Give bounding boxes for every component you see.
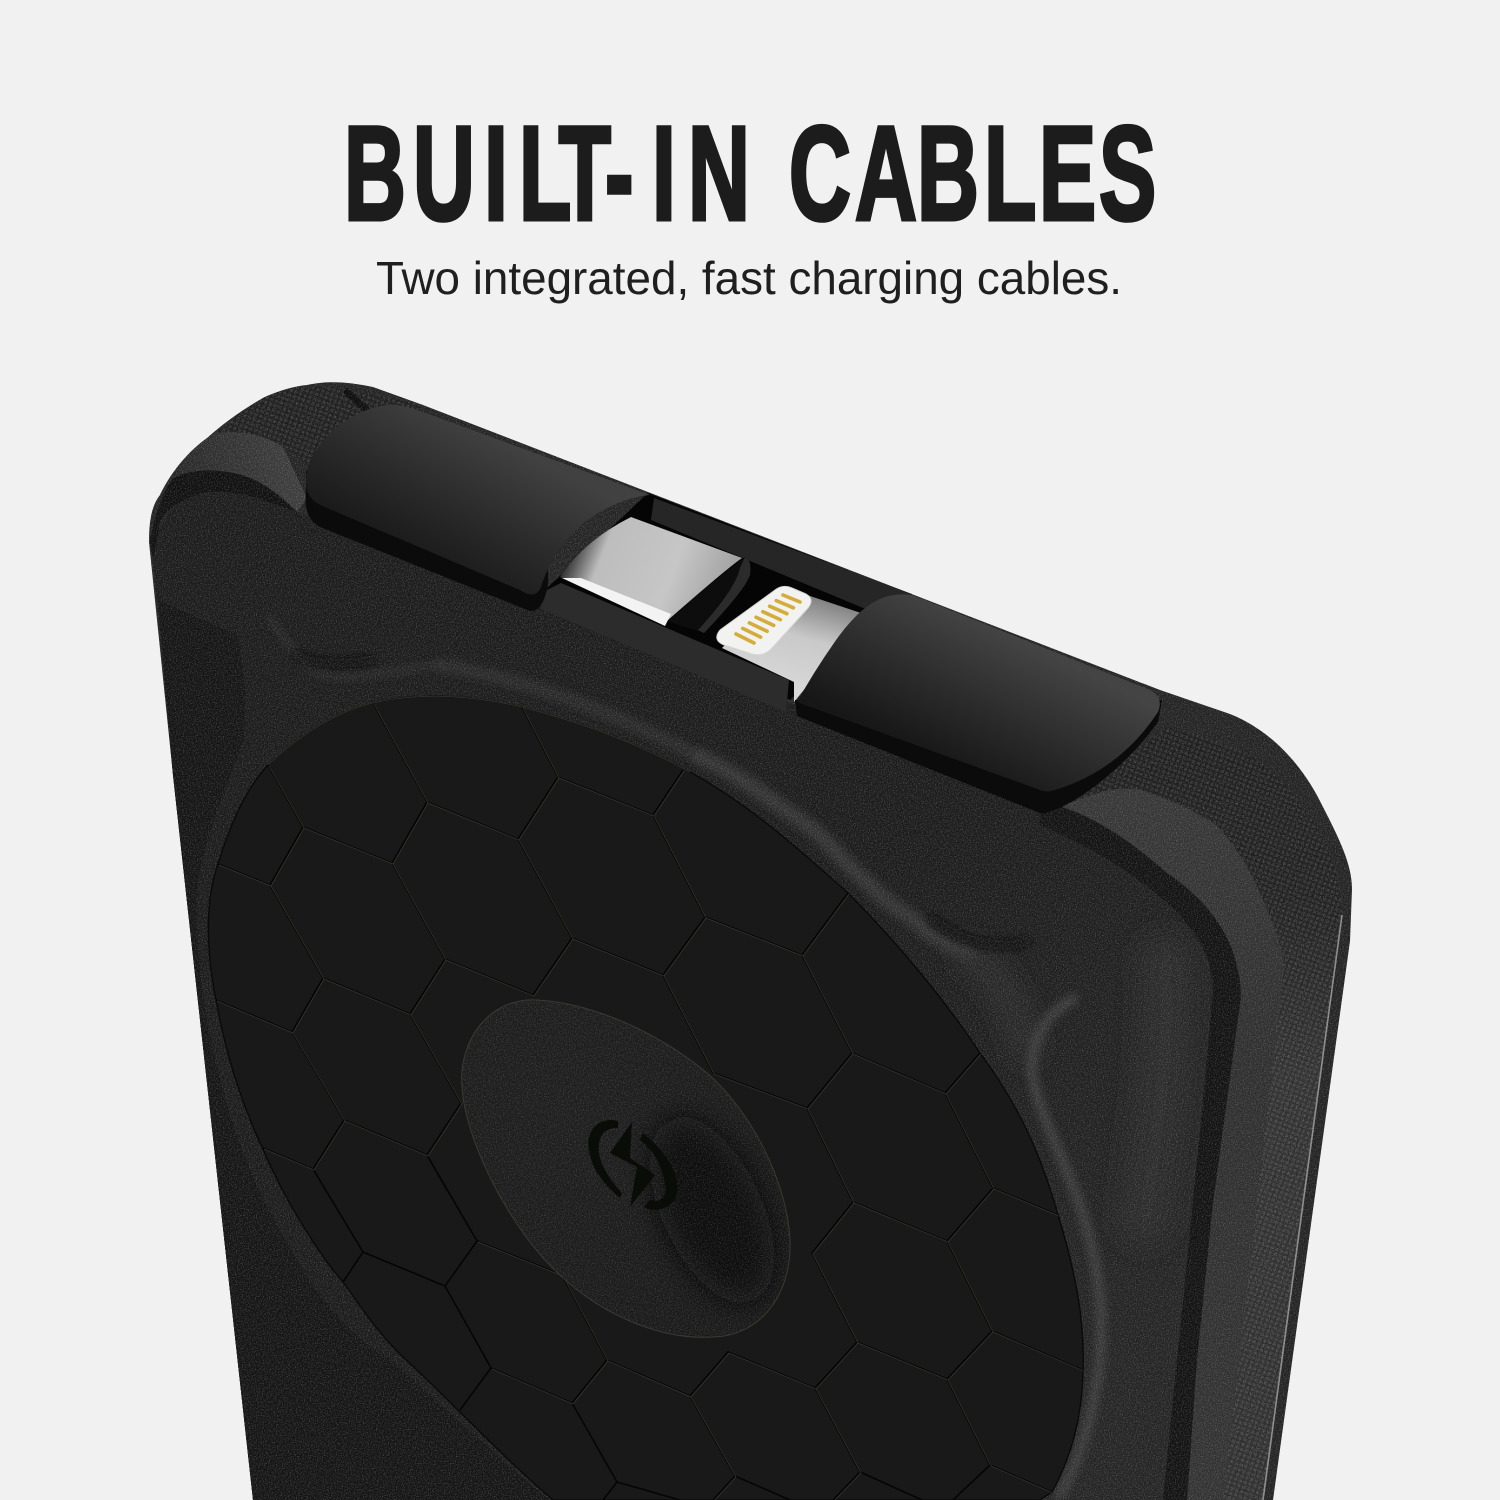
device outer shell bbox=[149, 382, 1352, 1500]
subtitle: Two integrated, fast charging cables. bbox=[376, 252, 1122, 304]
Lightning connector bbox=[717, 586, 867, 702]
slot rear wall bbox=[651, 498, 912, 612]
lightning tip bbox=[717, 586, 811, 655]
left groove bbox=[150, 470, 297, 560]
gold pins bbox=[736, 595, 800, 643]
disc plate bbox=[208, 696, 1083, 1500]
main back surface bbox=[153, 493, 1213, 1500]
power bank device bbox=[140, 375, 1360, 1500]
fabric band top left corner bbox=[215, 387, 423, 465]
moulded ridge highlights bbox=[270, 618, 1166, 1495]
dark lower-left shell bbox=[158, 600, 550, 1500]
fabric band right side bbox=[1070, 727, 1342, 1500]
slot front wall bbox=[541, 583, 789, 712]
right groove bbox=[1040, 800, 1241, 1500]
hexagon wireless charging disc bbox=[208, 696, 1086, 1500]
left raised lip bbox=[150, 432, 307, 542]
surface grain texture bbox=[140, 375, 1360, 1500]
USB-C connector bbox=[560, 517, 750, 633]
right raised lip bbox=[1040, 789, 1283, 1500]
hexagon grid lines bbox=[216, 703, 1086, 1500]
left connector cap bbox=[306, 405, 650, 611]
title: BUILT-IN CABLES bbox=[344, 98, 1156, 248]
cable slot recess bbox=[541, 493, 912, 700]
centre oval recess bbox=[455, 995, 800, 1340]
icon: charging bolt bbox=[588, 1120, 677, 1210]
right connector cap bbox=[795, 594, 1162, 813]
disc rim highlight bbox=[268, 696, 690, 772]
